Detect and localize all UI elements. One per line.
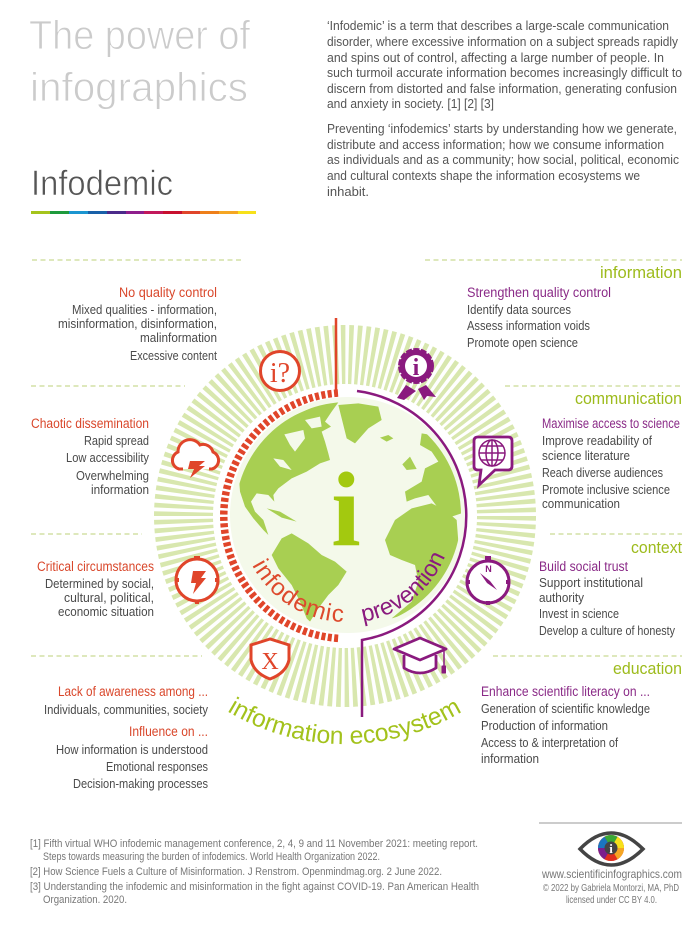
panel: information: information xyxy=(600,263,682,282)
panel: critical circumstances xyxy=(37,559,154,619)
title: The power of xyxy=(29,12,251,58)
panel: lack of awareness: Emotional responses xyxy=(106,760,208,774)
icon: rosette badge xyxy=(397,350,436,400)
panel: lack of awareness: Individuals, communities, society xyxy=(44,703,209,717)
icon: compass xyxy=(466,556,510,605)
references: [2] How Science Fuels a Culture of Misinformation. J Renstrom. Openmindmag.org. 2 June 2022. xyxy=(30,866,442,878)
credits xyxy=(541,867,682,906)
subtitle: Infodemic xyxy=(31,164,173,203)
panel: communication: science literature xyxy=(542,449,630,463)
panel: no quality control: Excessive content xyxy=(130,349,217,363)
intro paragraphs: inhabit. xyxy=(327,184,369,199)
panel: chaotic dissemination: Rapid spread xyxy=(84,434,149,448)
intro paragraphs: and cultural contexts shape the information ecosystems we xyxy=(327,168,640,183)
panel: communication: Promote inclusive science xyxy=(542,483,670,497)
logo: eye with rainbow iris xyxy=(539,823,682,865)
intro paragraphs: and anxiety in society. [1] [2] [3] xyxy=(327,96,494,111)
panel: chaotic dissemination: Chaotic dissemination xyxy=(31,416,149,431)
panel: context: authority xyxy=(539,591,585,605)
references: Steps towards measuring the burden of infodemics. World Health Organization 2022. xyxy=(43,851,380,863)
intro paragraphs: Preventing ‘infodemics’ starts by understanding how we generate, xyxy=(327,121,677,136)
panel: education xyxy=(481,659,682,766)
panel: chaotic dissemination xyxy=(31,416,150,497)
panel: communication: Reach diverse audiences xyxy=(542,466,663,480)
intro paragraphs: discern from distorted and false information, generating confusion xyxy=(327,81,677,96)
intro paragraphs: distribute and access information; how we consume information xyxy=(327,137,664,152)
intro paragraphs: as individuals and as a community; how social, political, economic xyxy=(327,152,679,167)
icon: stopwatch with lightning xyxy=(175,556,219,604)
panel: no quality control xyxy=(58,285,217,363)
icon: information question mark xyxy=(260,352,300,390)
panel: information: Promote open science xyxy=(467,336,578,350)
panel: communication: communication xyxy=(575,389,682,408)
panel: lack of awareness: How information is understood xyxy=(56,743,208,757)
panel: education: Production of information xyxy=(481,719,608,733)
panel: lack of awareness: Influence on ... xyxy=(129,724,208,739)
curved label: prevention: prevention xyxy=(362,553,445,626)
references: [3] Understanding the infodemic and misinformation in the fight against COVID-19. Pan American Health xyxy=(30,881,479,893)
panel: information: Identify data sources xyxy=(467,303,571,317)
centre letter i: i xyxy=(331,451,361,568)
panel: no quality control: No quality control xyxy=(119,285,217,300)
intro paragraphs: such turmoil accurate information becomes increasingly difficult to xyxy=(327,65,682,80)
panel: information: Assess information voids xyxy=(467,319,590,333)
panel: chaotic dissemination: Low accessibility xyxy=(66,451,150,465)
panel: critical circumstances: cultural, political, xyxy=(64,591,154,605)
panel: education: Enhance scientific literacy on ... xyxy=(481,684,650,699)
panel: critical circumstances: Critical circumstances xyxy=(37,559,154,574)
icon: information question mark: i? xyxy=(270,358,290,389)
icon: storm cloud xyxy=(172,440,219,478)
curved label: infodemic: infodemic xyxy=(252,558,344,622)
panel: context: Build social trust xyxy=(539,559,628,574)
panel: no quality control: malinformation xyxy=(140,331,217,345)
panel: chaotic dissemination: information xyxy=(91,483,149,497)
icon: compass: N xyxy=(485,564,492,574)
logo: eye with rainbow iris: i xyxy=(609,841,613,856)
icon: shield with X: X xyxy=(261,649,279,675)
rainbow bar xyxy=(31,211,256,214)
panel: context xyxy=(539,538,682,638)
title: infographics xyxy=(30,64,248,110)
panel: information xyxy=(467,263,682,350)
references: [1] Fifth virtual WHO infodemic management conference, 2, 4, 9 and 11 November 2021: meeting report. xyxy=(30,838,478,850)
curved label: information ecosystem: information ecosystem xyxy=(228,696,461,744)
panel: education: Generation of scientific knowledge xyxy=(481,702,650,716)
panel: communication: Improve readability of xyxy=(542,434,652,448)
icon: rosette badge: i xyxy=(413,355,420,381)
panel: education: information xyxy=(481,752,539,766)
icon: shield with X xyxy=(251,639,289,679)
panel: lack of awareness: Lack of awareness among ... xyxy=(58,684,208,699)
panel: critical circumstances: Determined by social, xyxy=(45,577,154,591)
intro paragraphs: disorder, where excessive information on a subject spreads rapidly xyxy=(327,34,678,49)
panel: chaotic dissemination: Overwhelming xyxy=(76,469,149,483)
credits: licensed under CC BY 4.0. xyxy=(566,894,657,906)
panel: critical circumstances: economic situation xyxy=(58,605,154,619)
panel: no quality control: misinformation, disinformation, xyxy=(58,317,217,331)
panel: lack of awareness xyxy=(44,684,209,791)
prevention arc: purple line xyxy=(357,391,466,717)
radial sunburst rays xyxy=(184,354,506,678)
panel: context: context xyxy=(631,538,682,557)
panel: information: Strengthen quality control xyxy=(467,285,611,300)
infodemic arc: red line and dashed ring xyxy=(224,318,340,638)
intro paragraphs: ‘Infodemic’ is a term that describes a large-scale communication xyxy=(327,18,669,33)
panel: education: education xyxy=(613,659,682,678)
panel: no quality control: Mixed qualities - information, xyxy=(72,303,217,317)
panel: context: Develop a culture of honesty xyxy=(539,624,676,638)
intro paragraphs: and spins out of control, affecting a large number of people. In xyxy=(327,50,664,65)
references xyxy=(30,838,479,906)
icon: graduation cap xyxy=(394,638,446,673)
intro paragraphs xyxy=(327,18,682,199)
globe xyxy=(230,397,467,633)
panel: context: Support institutional xyxy=(539,576,643,590)
panel: communication xyxy=(542,389,682,511)
panel: context: Invest in science xyxy=(539,607,619,621)
panel: communication: communication xyxy=(542,497,620,511)
title xyxy=(29,12,251,110)
panel: education: Access to & interpretation of xyxy=(481,736,618,750)
icon: speech bubble with globe xyxy=(474,437,512,485)
references: Organization. 2020. xyxy=(43,894,127,906)
panel: lack of awareness: Decision-making processes xyxy=(73,777,208,791)
